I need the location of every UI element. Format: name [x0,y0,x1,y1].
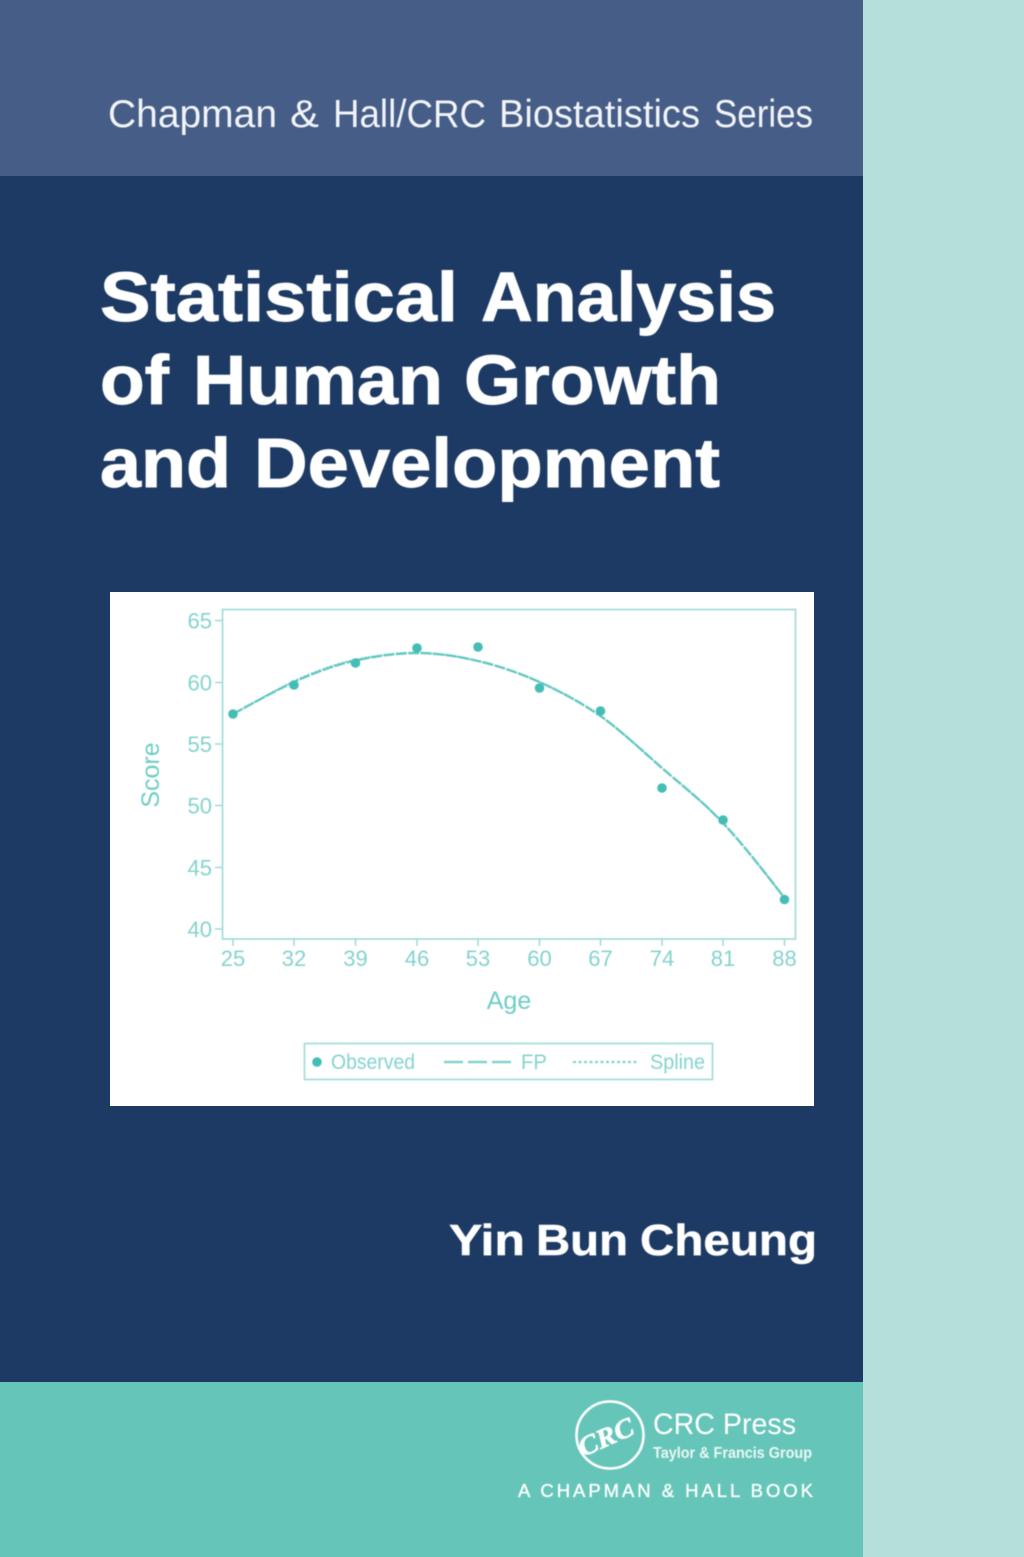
author: Yin [449,1216,525,1265]
publisher band [0,1382,863,1557]
x axis ticks and labels: 81 [711,946,735,971]
x axis ticks and labels [221,939,797,971]
x axis ticks and labels: 60 [527,946,552,971]
title: Growth [464,341,721,419]
title: Development [254,424,720,502]
x axis ticks and labels: 32 [282,946,306,971]
publisher contents [518,1402,814,1501]
author: Bun [536,1216,628,1265]
publisher name: CRC Press [653,1408,796,1441]
y axis title: Score [137,742,165,808]
icon: CRC logo [573,1402,644,1468]
title [100,258,776,502]
chart panel [110,592,814,1106]
y axis ticks and labels: 60 [188,670,212,696]
title: Analysis [481,258,776,336]
icon: CRC logo: CRC [573,1411,639,1462]
series name: Series [714,93,813,136]
title: and [100,424,231,502]
legend [304,1044,712,1080]
legend: FP [521,1051,547,1074]
y axis ticks and labels: 55 [188,732,212,757]
x axis ticks and labels: 39 [343,946,368,971]
title: of [100,341,170,419]
x axis title: Age [487,987,531,1015]
author [449,1216,817,1265]
series band [0,0,863,176]
fitted curves [233,652,784,898]
series name: Chapman [108,93,277,136]
author: Cheung [640,1216,817,1265]
observed data points [228,642,789,904]
y axis ticks and labels: 40 [188,917,212,942]
series name [108,93,813,136]
right pale teal strip [863,0,1024,1557]
plot contents [137,608,797,1080]
y axis ticks and labels: 50 [188,794,212,818]
series name: Biostatistics [499,93,700,136]
series name: Hall/CRC [333,93,486,136]
series name: & [290,93,319,136]
y axis ticks and labels: 45 [188,856,212,880]
x axis ticks and labels: 25 [221,946,245,971]
title: Human [193,341,443,419]
title: Statistical [100,258,458,336]
navy cover panel [0,176,863,1382]
x axis ticks and labels: 46 [405,946,429,971]
y axis ticks and labels [188,608,222,942]
x axis ticks and labels: 74 [650,946,674,971]
x axis ticks and labels: 53 [466,946,490,971]
legend: Observed [331,1051,415,1074]
legend: Spline [650,1051,705,1074]
x axis ticks and labels: 67 [588,946,613,971]
plot frame [222,610,796,939]
publisher group: Taylor & Francis Group [653,1445,812,1462]
imprint line: A CHAPMAN & HALL BOOK [518,1480,814,1501]
y axis ticks and labels: 65 [188,608,212,634]
x axis ticks and labels: 88 [772,946,797,971]
